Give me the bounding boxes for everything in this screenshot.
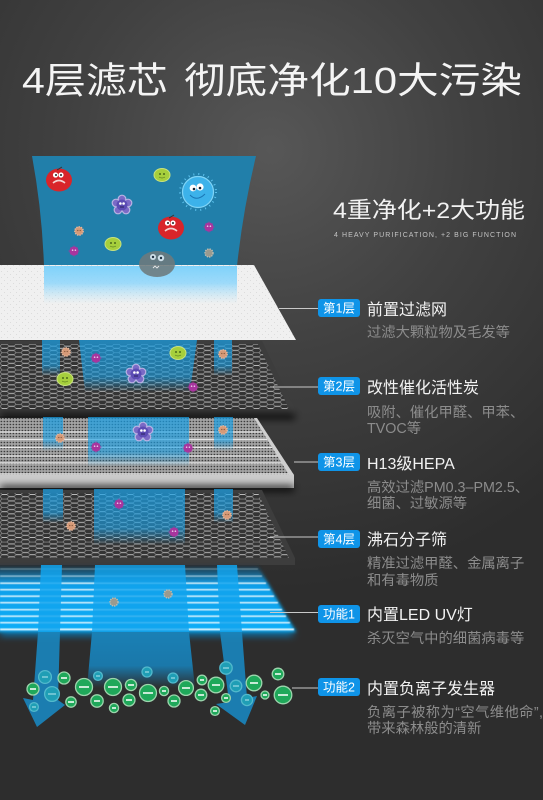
subtitle: 4 purifications + 2 functions: 4重净化+2大功能 [333,198,525,223]
label: function 2: 内置负离子发生器 [367,680,495,698]
down arrow: left [23,632,65,727]
label: layer 2: 吸附、催化甲醛、甲苯、 [367,404,524,421]
badge: layer 3 [318,453,360,471]
label: layer 1 [318,299,510,341]
label: function 2: 带来森林般的清新 [367,720,481,737]
down flow: centre [87,632,195,688]
layer 1 blue air sheet with germs [32,156,256,266]
negative ions [27,662,292,715]
icon: grey germ [139,251,175,277]
badge: layer 1: 第1层 [323,302,355,316]
shadow under layer 3 [0,486,294,491]
label: layer 3: H13级HEPA [367,455,455,473]
leader lines [270,308,318,688]
title [22,60,522,101]
label: layer 4: 精准过滤甲醛、金属离子 [367,555,524,572]
badge: function 1: 功能1 [323,608,355,622]
title: 彻底净化10大污染 [184,60,522,101]
layer 4 zeolite sheet [0,489,295,565]
down arrow: right [216,632,257,725]
badge: layer 4: 第4层 [323,532,355,546]
shadow under layer 2 [0,414,295,419]
air bands crossing the UV lamp [38,565,242,632]
label: function 1: 杀灭空气中的细菌病毒等 [367,629,524,647]
badge: layer 2 [318,377,360,395]
badge: layer 3: 第3层 [323,456,355,470]
badge: layer 2: 第2层 [323,380,355,394]
title: 4层滤芯 [22,60,168,101]
label: layer 4: 沸石分子筛 [367,530,447,549]
UV lamp sheet [0,566,296,635]
icon: blue germ [180,174,216,210]
label: layer 3: 细菌、过敏源等 [367,494,467,512]
label: function 2: 负离子被称为“空气维他命”, [367,703,543,721]
label: layer 4 [318,530,524,589]
layer 3 HEPA sheet [0,417,294,488]
badge: function 2: 功能2 [323,680,355,694]
layer 2 activated carbon sheet [0,340,295,416]
label: layer 1: 过滤大颗粒物及毛发等 [367,323,510,341]
white filter layer 1 [0,251,296,340]
badge: function 2 [318,678,360,696]
label: function 1: 内置LED UV灯 [367,606,473,624]
subtitle: 4 purifications + 2 functions [333,198,525,239]
label: layer 2 [318,377,524,437]
label: layer 2: 改性催化活性炭 [367,379,479,397]
label: function 1 [318,605,524,647]
label: layer 1: 前置过滤网 [367,301,447,319]
subtitle: 4 purifications + 2 functions: 4 HEAVY PURIFICATION, +2 BIG FUNCTION [334,232,516,239]
badge: layer 1 [318,299,360,317]
badge: layer 4 [318,530,360,548]
badge: function 1 [318,605,360,623]
label: layer 2: TVOC等 [367,419,421,437]
label: layer 3 [318,453,529,512]
label: function 2 [318,678,543,737]
label: layer 4: 和有毒物质 [367,572,438,589]
label: layer 3: 高效过滤PM0.3–PM2.5、 [367,479,529,496]
